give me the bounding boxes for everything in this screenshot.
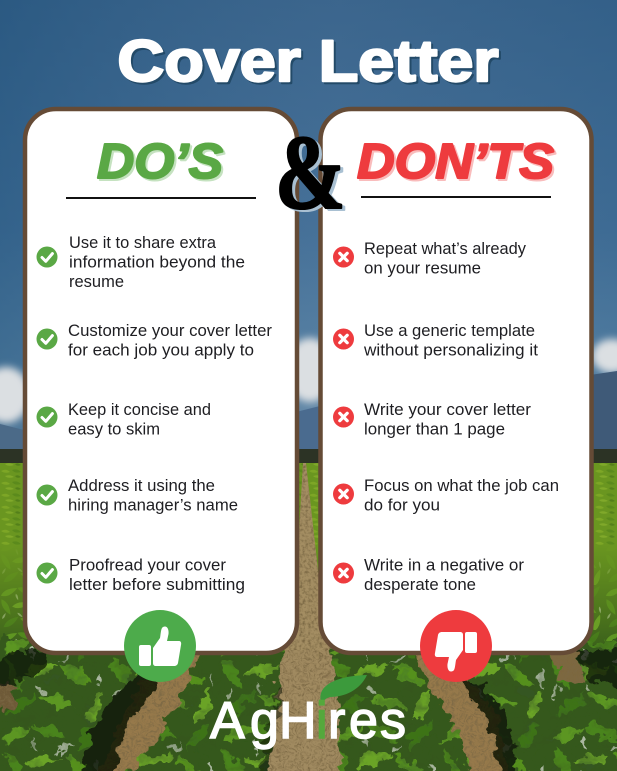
- panel: do's: [25, 109, 297, 682]
- panel card: [25, 109, 297, 653]
- item: concise: [36, 401, 211, 438]
- item: negative tone: desperate tone: [364, 576, 476, 594]
- item: longer than 1 page: [333, 401, 532, 438]
- item: share extra information: [36, 234, 245, 291]
- item: negative tone: [333, 556, 525, 594]
- logo: AgHires: AgHires: [210, 692, 406, 750]
- item: generic template: [333, 322, 538, 360]
- icon: leaf: [320, 675, 367, 704]
- item: proofread: letter before submitting: [69, 576, 245, 594]
- item: hiring manager: hiring manager’s name: [68, 496, 238, 514]
- heading: don'ts: DON’TS: [359, 137, 556, 191]
- title: Cover Letter: [118, 29, 498, 94]
- title: Cover Letter: [120, 31, 500, 96]
- item: customize: Customize your cover letter: [68, 322, 273, 340]
- item: generic template: without personalizing it: [363, 342, 538, 360]
- dirt rows: [100, 640, 205, 771]
- item: focus on job: do for you: [364, 496, 440, 514]
- row shadows: [78, 672, 155, 771]
- item: concise: Keep it concise and: [68, 401, 211, 419]
- item: share extra information: information beyond the: [69, 254, 245, 272]
- item: customize: [36, 322, 273, 360]
- item: repeat: on your resume: [364, 260, 481, 278]
- item: concise: easy to skim: [68, 420, 160, 438]
- item: longer than 1 page: longer than 1 page: [364, 420, 505, 438]
- ampersand: &: [278, 115, 349, 233]
- item: focus on job: [333, 477, 559, 514]
- item: share extra information: resume: [69, 273, 124, 291]
- item: hiring manager: Address it using the: [68, 477, 215, 495]
- foreground foliage and soil: [0, 640, 617, 771]
- item: generic template: Use a generic template: [364, 322, 535, 340]
- item: focus on job: Focus on what the job can: [364, 477, 559, 495]
- item: repeat: Repeat what’s already: [364, 240, 527, 258]
- centre path through the gap between cards: [282, 463, 328, 650]
- icon: thumbs up: [124, 610, 196, 682]
- heading: don'ts: DON’TS: [357, 135, 554, 189]
- icon: thumbs down: [420, 610, 492, 682]
- item: repeat: [333, 240, 527, 278]
- panel card: [320, 109, 592, 653]
- mid field: [0, 463, 617, 563]
- item: negative tone: Write in a negative or: [364, 556, 525, 574]
- heading: do's: DO’S: [97, 135, 223, 189]
- item: share extra information: Use it to share extra: [69, 234, 217, 252]
- item: proofread: Proofread your cover: [69, 556, 227, 574]
- ampersand: &: [275, 113, 346, 231]
- item: customize: for each job you apply to: [68, 342, 254, 360]
- item: hiring manager: [36, 477, 238, 514]
- heading: do's: DO’S: [99, 137, 225, 191]
- item: proofread: [36, 556, 245, 594]
- item: longer than 1 page: Write your cover letter: [364, 401, 532, 419]
- panel: don'ts: [320, 109, 592, 682]
